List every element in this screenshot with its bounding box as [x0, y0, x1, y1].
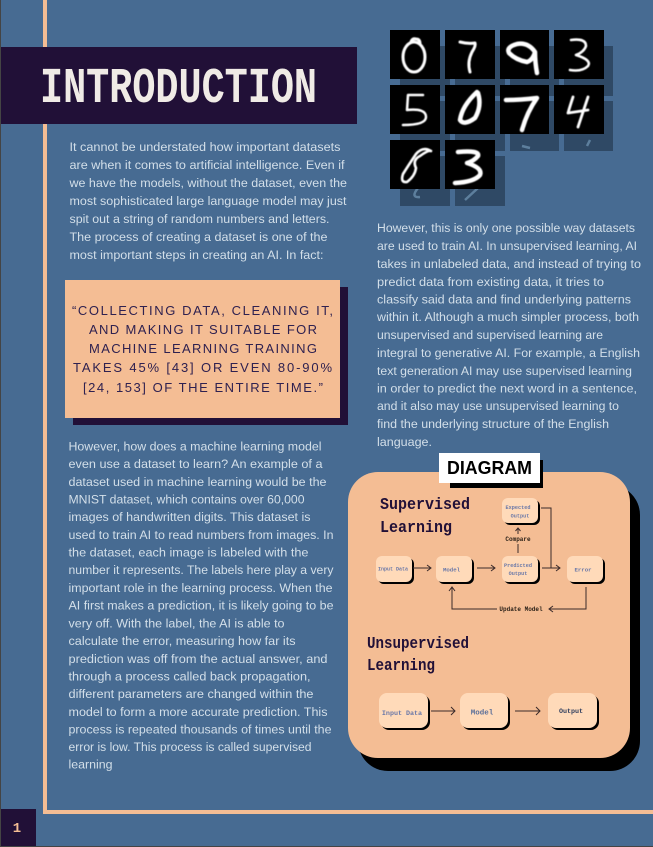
- unsupervised learning paragraph: language.: [377, 435, 432, 449]
- heading: unsupervised learning: [367, 635, 469, 676]
- unsupervised learning paragraph: in order to predict the next word in a sentence,: [377, 382, 637, 396]
- quote callout: [24, 153] OF THE ENTIRE TIME.”: [83, 380, 323, 395]
- supervised flow chart: Predicted: [504, 563, 532, 569]
- diagram label: [439, 453, 543, 488]
- supervised flow chart: Output: [509, 571, 527, 577]
- supervised learning paragraph: very off. With the label, the AI is able to: [68, 616, 285, 630]
- supervised learning paragraph: learning: [68, 758, 113, 772]
- intro paragraph: spit out a string of random numbers and letters.: [70, 212, 330, 226]
- unsupervised learning paragraph: classify said data and find underlying patterns: [377, 292, 631, 306]
- intro paragraph: we have the models, without the dataset, even the: [68, 176, 347, 190]
- supervised learning paragraph: even use a dataset to learn? An example of a: [68, 457, 323, 471]
- supervised learning paragraph: different parameters are changed within the: [68, 687, 314, 701]
- supervised learning paragraph: important role in the learning process. When the: [68, 581, 333, 595]
- MNIST digit tiles: [390, 30, 604, 189]
- supervised learning paragraph: However, how does a machine learning model: [68, 440, 322, 454]
- unsupervised learning paragraph: However, this is only one possible way datasets: [377, 221, 635, 235]
- supervised learning paragraph: calculate the error, measuring how far its: [68, 634, 296, 648]
- intro paragraph: most sophisticated large language model may just: [70, 194, 347, 208]
- unsupervised learning paragraph: takes in unlabeled data, and instead of trying to: [377, 257, 641, 271]
- unsupervised learning paragraph: text generation AI may use supervised learning: [377, 364, 632, 378]
- supervised flow chart: Input Data: [378, 566, 408, 572]
- unsupervised learning paragraph: find the underlying structure of the English: [377, 417, 609, 431]
- intro paragraph: [68, 140, 347, 262]
- unsupervised learning paragraph: [376, 221, 641, 449]
- unsupervised flow chart: Model: [471, 710, 494, 718]
- diagram panel: [348, 453, 640, 771]
- heading: supervised learning: [380, 496, 470, 538]
- supervised flow chart: Model: [443, 566, 461, 574]
- title banner: [1, 47, 357, 124]
- supervised flow chart: Expected: [506, 505, 530, 511]
- supervised learning paragraph: number it represents. The labels here play a very: [68, 563, 334, 577]
- unsupervised learning paragraph: integral to generative AI. For example, a English: [377, 346, 640, 360]
- supervised flow chart: Output: [511, 514, 529, 520]
- title banner: INTRODUCTION: [40, 61, 317, 118]
- supervised learning paragraph: MNIST dataset, which contains over 60,000: [68, 492, 305, 506]
- heading: supervised learning: Learning: [380, 519, 452, 538]
- heading: unsupervised learning: Learning: [367, 657, 435, 676]
- heading: unsupervised learning: Unsupervised: [367, 635, 469, 654]
- quote callout: [65, 280, 348, 425]
- unsupervised learning paragraph: and it also may use unsupervised learning to: [377, 399, 619, 413]
- supervised learning paragraph: [68, 440, 334, 772]
- intro paragraph: are when it comes to artificial intelligence. Even if: [70, 158, 345, 172]
- supervised learning paragraph: dataset used in machine learning would be the: [68, 475, 327, 489]
- quote callout: AND MAKING IT SUITABLE FOR: [89, 322, 317, 337]
- unsupervised flow chart: Output: [559, 708, 583, 716]
- supervised flow chart: Update Model: [499, 606, 543, 613]
- supervised learning paragraph: model to form a more accurate prediction. This: [68, 705, 328, 719]
- supervised flow chart: Error: [574, 566, 592, 574]
- supervised learning paragraph: error is low. This process is called supervised: [68, 740, 312, 754]
- MNIST digit shadows: [400, 46, 613, 206]
- supervised learning paragraph: images of handwritten digits. This dataset is: [68, 510, 310, 524]
- quote callout: MACHINE LEARNING TRAINING: [89, 341, 317, 356]
- unsupervised learning paragraph: within it. Although a much simpler process, both: [376, 310, 639, 324]
- supervised learning paragraph: the dataset, each image is labeled with the: [68, 546, 309, 560]
- quote callout: “COLLECTING DATA, CLEANING IT,: [72, 303, 333, 318]
- intro paragraph: The process of creating a dataset is one of the: [70, 230, 328, 244]
- unsupervised flow chart: [379, 693, 599, 730]
- unsupervised learning paragraph: predict data from existing data, it tries to: [377, 275, 604, 289]
- page number: 1: [13, 821, 21, 837]
- intro paragraph: It cannot be understated how important datasets: [70, 140, 340, 154]
- unsupervised learning paragraph: are used to train AI. In unsupervised learning, AI: [377, 239, 637, 253]
- heading: supervised learning: Supervised: [380, 496, 470, 515]
- supervised learning paragraph: AI first makes a prediction, it is likely going to be: [68, 598, 334, 612]
- unsupervised flow chart: Input Data: [382, 710, 422, 718]
- supervised learning paragraph: used to train AI to read numbers from images. In: [68, 528, 334, 542]
- diagram label: DIAGRAM: [447, 458, 532, 478]
- unsupervised learning paragraph: unsupervised and supervised learning are: [377, 328, 603, 342]
- quote callout: TAKES 45% [43] OR EVEN 80-90%: [73, 360, 332, 375]
- intro paragraph: most important steps in creating an AI. In fact:: [70, 248, 324, 262]
- page number: [1, 809, 36, 846]
- supervised flow chart: [376, 498, 605, 613]
- supervised learning paragraph: process is repeated thousands of times until the: [68, 722, 332, 736]
- supervised flow chart: Compare: [505, 536, 531, 543]
- supervised learning paragraph: through a process called back propagation,: [68, 670, 310, 684]
- supervised learning paragraph: prediction was off from the actual answer, and: [68, 652, 328, 666]
